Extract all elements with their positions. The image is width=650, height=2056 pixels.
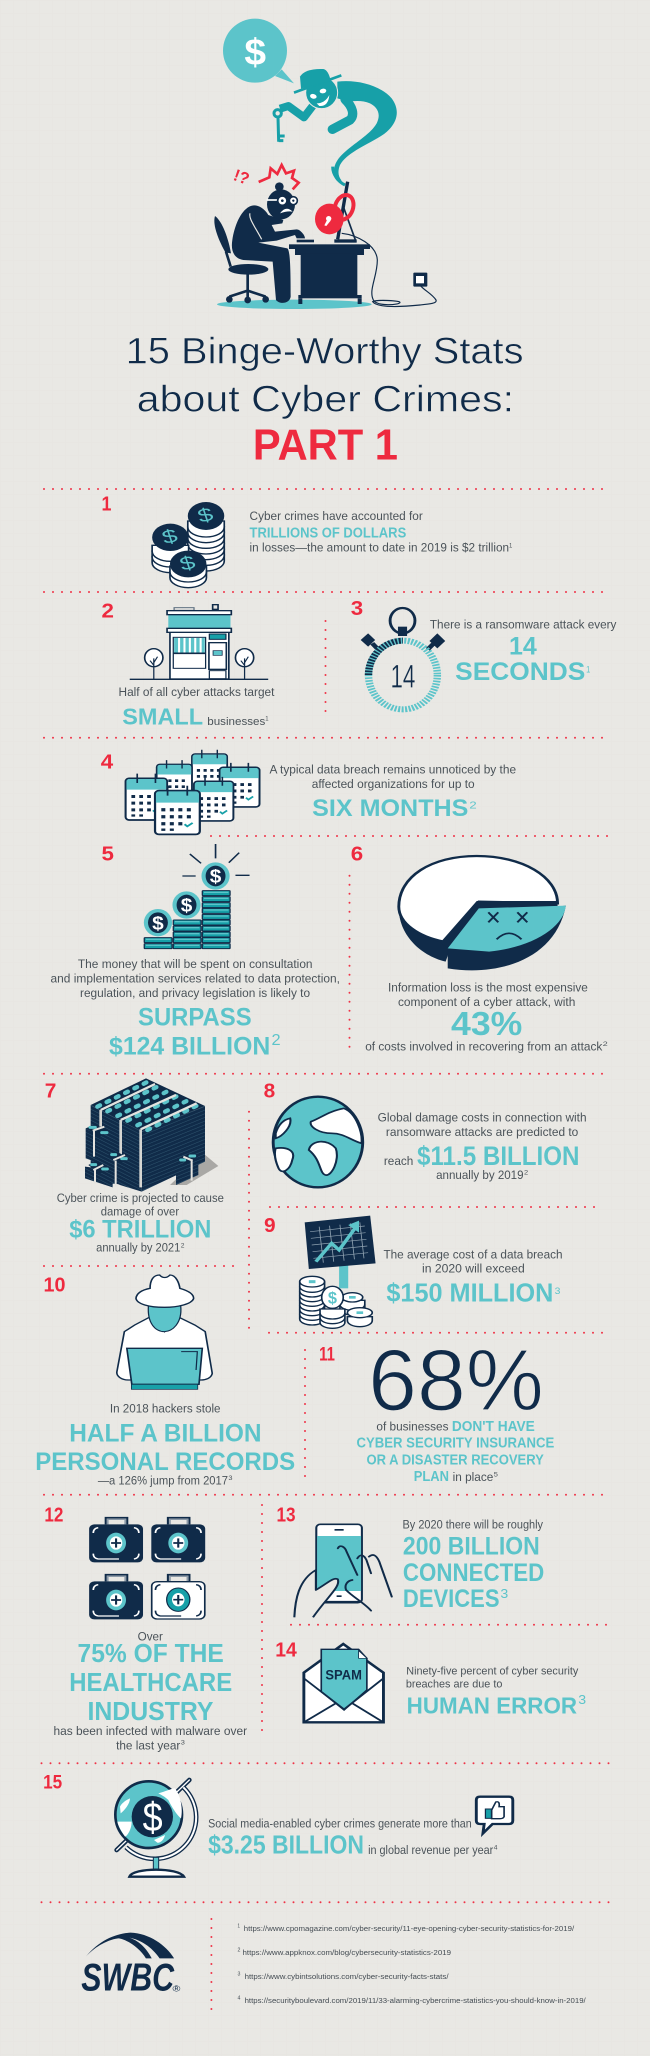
panel: stat 15 $3.25 billion: in global revenue per year <box>368 1843 494 1857</box>
panel: stat 12 healthcare industry: 12 <box>44 1504 63 1526</box>
panel: stat 11 68% no insurance <box>319 1331 554 1485</box>
icon: growing coin stacks <box>144 844 250 949</box>
icon: spam envelope <box>304 1644 383 1722</box>
small stack lower left <box>85 1162 113 1187</box>
panel: stat 15 $3.25 billion <box>43 1771 513 1877</box>
panel: stat 4 six months <box>101 750 516 834</box>
panel: stat 10 half a billion records: —a 126% jump from 2017 <box>98 1474 228 1487</box>
icon: chart board with coins: $ <box>328 1288 337 1307</box>
panel: stat 3 ransomware every 14 seconds: 14 <box>509 632 537 661</box>
panel: stat 1 trillions of dollars: in losses—the amount to date in 2019 is $2 trillion <box>250 541 509 554</box>
panel: stat 5 surpass $124 billion: 5 <box>102 843 114 865</box>
panel: stat 12 healthcare industry: INDUSTRY <box>87 1697 214 1726</box>
logo: SWBC: SWBC <box>81 1956 175 2000</box>
panel: stat 3 ransomware every 14 seconds: 1 <box>586 665 590 675</box>
icon: growing coin stacks: $ <box>210 867 222 887</box>
icon: globe with dollar sign <box>115 1780 196 1877</box>
icon: stopwatch: 14 <box>390 658 415 694</box>
source footnotes: https://www.cpomagazine.com/cyber-security/11-eye-opening-cyber-security-statistics-for-2019/ <box>244 1925 575 1933</box>
panel: stat 10 half a billion records: HALF A BILLION <box>69 1419 262 1448</box>
panel: stat 12 healthcare industry: HEALTHCARE <box>69 1668 232 1697</box>
panel: stat 10 half a billion records: 10 <box>44 1274 65 1296</box>
panel: stat 4 six months: 2 <box>469 801 477 811</box>
panel: stat 13 200 billion devices: 3 <box>500 1586 508 1602</box>
panel: stat 6 information loss 43% <box>351 843 608 1053</box>
panel: stat 14 human error: HUMAN ERROR <box>407 1692 577 1719</box>
panel: stat 4 six months: affected organizations for up to <box>312 777 475 791</box>
source footnotes: https://securityboulevard.com/2019/11/33-alarming-cybercrime-statistics-you-should-know-in-2019/ <box>245 1997 586 2005</box>
logo: SWBC <box>81 1933 181 2000</box>
panel: stat 2 small businesses: SMALL <box>122 705 203 730</box>
source footnotes: 3 <box>238 1972 241 1977</box>
panel: stat 8 $11.5 billion: 2 <box>524 1168 528 1176</box>
panel: stat 12 healthcare industry: 3 <box>181 1738 185 1746</box>
panel: stat 1 trillions of dollars: 1 <box>102 493 112 515</box>
icon: alarm marks: !? <box>231 166 252 189</box>
panel: stat 8 $11.5 billion <box>264 1080 587 1187</box>
icon: hand tapping smartphone <box>294 1524 392 1617</box>
icon: worried worker at desk <box>214 167 436 309</box>
panel: stat 7 $6 trillion: 7 <box>45 1080 56 1102</box>
panel: stat 1 trillions of dollars: TRILLIONS OF DOLLARS <box>250 524 406 541</box>
panel: stat 12 healthcare industry: the last year <box>116 1739 181 1752</box>
panel: stat 10 half a billion records <box>35 1274 295 1487</box>
panel: stat 9 $150 million <box>264 1214 563 1328</box>
panel: stat 13 200 billion devices: CONNECTED <box>403 1559 544 1587</box>
panel: stat 8 $11.5 billion: reach <box>384 1154 413 1168</box>
panel: stat 7 $6 trillion: Cyber crime is projected to cause <box>57 1191 224 1205</box>
panel: stat 11 68% no insurance: 68% <box>368 1331 544 1429</box>
panel: stat 6 information loss 43%: 43% <box>451 1005 522 1042</box>
panel: stat 15 $3.25 billion: $3.25 BILLION <box>208 1830 364 1860</box>
panel: stat 9 $150 million: $150 MILLION <box>386 1278 553 1308</box>
panel: stat 5 surpass $124 billion: The money that will be spent on consultation <box>78 957 313 971</box>
panel: stat 9 $150 million: in 2020 will exceed <box>422 1262 525 1275</box>
panel: stat 15 $3.25 billion: Social media-enabled cyber crimes generate more than <box>208 1817 472 1830</box>
icon: hooded hacker with laptop <box>117 1275 212 1389</box>
panel: stat 6 information loss 43%: component of a cyber attack, with <box>398 995 575 1009</box>
panel: stat 4 six months: A typical data breach remains unnoticed by the <box>269 763 516 776</box>
panel: stat 8 $11.5 billion: $11.5 BILLION <box>417 1142 580 1171</box>
panel: stat 11 68% no insurance: PLAN <box>414 1468 449 1485</box>
panel: stat 9 $150 million: The average cost of a data breach <box>383 1248 563 1261</box>
icon: storefront <box>130 605 268 679</box>
panel: stat 13 200 billion devices: 13 <box>276 1504 296 1526</box>
icon: alarm marks <box>231 165 299 189</box>
icon: globe with dollar sign: $ <box>143 1794 163 1840</box>
icon: growing coin stacks: $ <box>181 896 193 916</box>
panel: stat 5 surpass $124 billion <box>51 843 340 1061</box>
panel: stat 14 human error: 3 <box>578 1692 586 1708</box>
panel: stat 12 healthcare industry <box>44 1504 247 1752</box>
panel: stat 7 $6 trillion: damage of over <box>101 1205 179 1218</box>
icon: spam envelope: SPAM <box>325 1668 362 1683</box>
panel: stat 6 information loss 43%: Information loss is the most expensive <box>388 981 588 994</box>
panel: stat 6 information loss 43%: 2 <box>603 1040 608 1048</box>
icon: coin stacks: $ <box>177 552 198 575</box>
panel: stat 13 200 billion devices: 200 BILLION <box>403 1533 540 1561</box>
panel: stat 14 human error: Ninety-five percent of cyber security <box>406 1665 579 1677</box>
icon: hacker genie with key <box>274 69 397 181</box>
panel: stat 4 six months: 4 <box>101 751 114 773</box>
title <box>126 331 524 469</box>
panel: stat 10 half a billion records: PERSONAL RECORDS <box>35 1448 295 1476</box>
panel: stat 4 six months: SIX MONTHS <box>312 794 468 821</box>
panel: stat 8 $11.5 billion: ransomware attacks are predicted to <box>386 1125 578 1139</box>
hero illustration: hacker stealing from office worker <box>214 19 436 309</box>
panel: stat 7 $6 trillion: 2 <box>181 1241 184 1249</box>
source footnotes: https://www.cybintsolutions.com/cyber-security-facts-stats/ <box>245 1973 449 1981</box>
title: PART 1 <box>253 421 398 469</box>
panel: stat 13 200 billion devices: By 2020 there will be roughly <box>403 1518 543 1531</box>
panel: stat 10 half a billion records: In 2018 hackers stole <box>110 1402 221 1415</box>
panel: stat 7 $6 trillion: $6 TRILLION <box>69 1216 211 1244</box>
panel: stat 2 small businesses: 2 <box>102 600 114 622</box>
panel: stat 7 $6 trillion <box>45 1078 224 1254</box>
panel: stat 13 200 billion devices <box>276 1504 544 1617</box>
panel: stat 11 68% no insurance: of businesses <box>376 1420 449 1433</box>
panel: stat 2 small businesses: businesses <box>207 715 265 728</box>
panel: stat 2 small businesses: 1 <box>265 714 269 722</box>
panel: stat 7 $6 trillion: annually by 2021 <box>96 1241 180 1254</box>
panel: stat 8 $11.5 billion: 8 <box>264 1080 275 1102</box>
title: about Cyber Crimes: <box>137 379 514 420</box>
panel: stat 11 68% no insurance: DON'T HAVE <box>452 1418 535 1435</box>
icon: chart board with coins <box>300 1216 376 1328</box>
icon: sad pie chart <box>399 856 566 970</box>
panel: stat 11 68% no insurance: in place <box>453 1470 493 1484</box>
source footnotes: 4 <box>238 1996 241 2001</box>
source footnotes <box>238 1924 586 2005</box>
panel: stat 2 small businesses <box>102 600 275 730</box>
speech bubble with dollar sign: $ <box>244 30 266 72</box>
icon: coin stacks: $ <box>159 526 181 548</box>
panel: stat 9 $150 million: 9 <box>264 1214 276 1236</box>
logo: SWBC: ® <box>172 1984 181 1993</box>
icon: stopwatch <box>361 608 445 709</box>
panel: stat 11 68% no insurance: OR A DISASTER RECOVERY <box>366 1451 544 1468</box>
panel: stat 11 68% no insurance: 5 <box>494 1470 498 1478</box>
panel: stat 13 200 billion devices: DEVICES <box>403 1585 500 1613</box>
icon: thumbs up speech bubble <box>476 1797 513 1833</box>
panel: stat 12 healthcare industry: has been infected with malware over <box>53 1724 247 1738</box>
panel: stat 8 $11.5 billion: Global damage costs in connection with <box>378 1111 587 1124</box>
panel: stat 5 surpass $124 billion: $124 BILLION <box>109 1032 270 1061</box>
icon: growing coin stacks: $ <box>152 913 164 934</box>
panel: stat 14 human error: 14 <box>275 1639 297 1661</box>
small stack right <box>176 1153 198 1185</box>
source footnotes: https://www.appknox.com/blog/cybersecurity-statistics-2019 <box>243 1949 451 1957</box>
panel: stat 11 68% no insurance: 11 <box>319 1343 335 1365</box>
panel: stat 5 surpass $124 billion: and implementation services related to data protection, <box>51 972 340 985</box>
panel: stat 5 surpass $124 billion: 2 <box>272 1031 281 1049</box>
panel: stat 5 surpass $124 billion: SURPASS <box>138 1003 252 1032</box>
panel: stat 9 $150 million: 3 <box>555 1286 561 1297</box>
icon: calendars <box>126 750 260 834</box>
panel: stat 6 information loss 43%: 6 <box>351 843 363 865</box>
panel: stat 3 ransomware every 14 seconds <box>351 597 617 709</box>
panel: stat 8 $11.5 billion: annually by 2019 <box>436 1168 524 1182</box>
panel: stat 12 healthcare industry: 75% OF THE <box>78 1639 224 1668</box>
icon: stacks of cash <box>85 1078 218 1192</box>
panel: stat 1 trillions of dollars: 1 <box>509 541 512 549</box>
icon: medical kits <box>89 1518 205 1619</box>
panel: stat 14 human error <box>275 1639 586 1722</box>
panel: stat 1 trillions of dollars <box>102 493 512 588</box>
panel: stat 10 half a billion records: 3 <box>228 1474 233 1482</box>
panel: stat 15 $3.25 billion: 4 <box>494 1843 497 1851</box>
small stack left top <box>86 1124 109 1167</box>
panel: stat 3 ransomware every 14 seconds: 3 <box>351 597 363 619</box>
panel: stat 2 small businesses: Half of all cyber attacks target <box>119 685 275 699</box>
panel: stat 5 surpass $124 billion: regulation, and privacy legislation is likely to <box>80 986 310 1000</box>
panel: stat 1 trillions of dollars: Cyber crimes have accounted for <box>250 509 423 523</box>
panel: stat 15 $3.25 billion: 15 <box>43 1771 62 1793</box>
source footnotes: 1 <box>238 1924 241 1929</box>
panel: stat 3 ransomware every 14 seconds: SECONDS <box>455 658 585 686</box>
speech bubble with dollar sign <box>223 19 294 83</box>
icon: globe <box>273 1097 363 1187</box>
small stack middle <box>108 1152 129 1187</box>
icon: coin stacks: $ <box>195 504 216 527</box>
panel: stat 11 68% no insurance: CYBER SECURITY INSURANCE <box>357 1434 554 1451</box>
icon: coin stacks <box>152 502 224 588</box>
panel: stat 12 healthcare industry: Over <box>138 1630 163 1643</box>
title: 15 Binge-Worthy Stats <box>126 331 524 371</box>
source footnotes: 2 <box>238 1948 241 1953</box>
panel: stat 14 human error: breaches are due to <box>406 1678 503 1690</box>
